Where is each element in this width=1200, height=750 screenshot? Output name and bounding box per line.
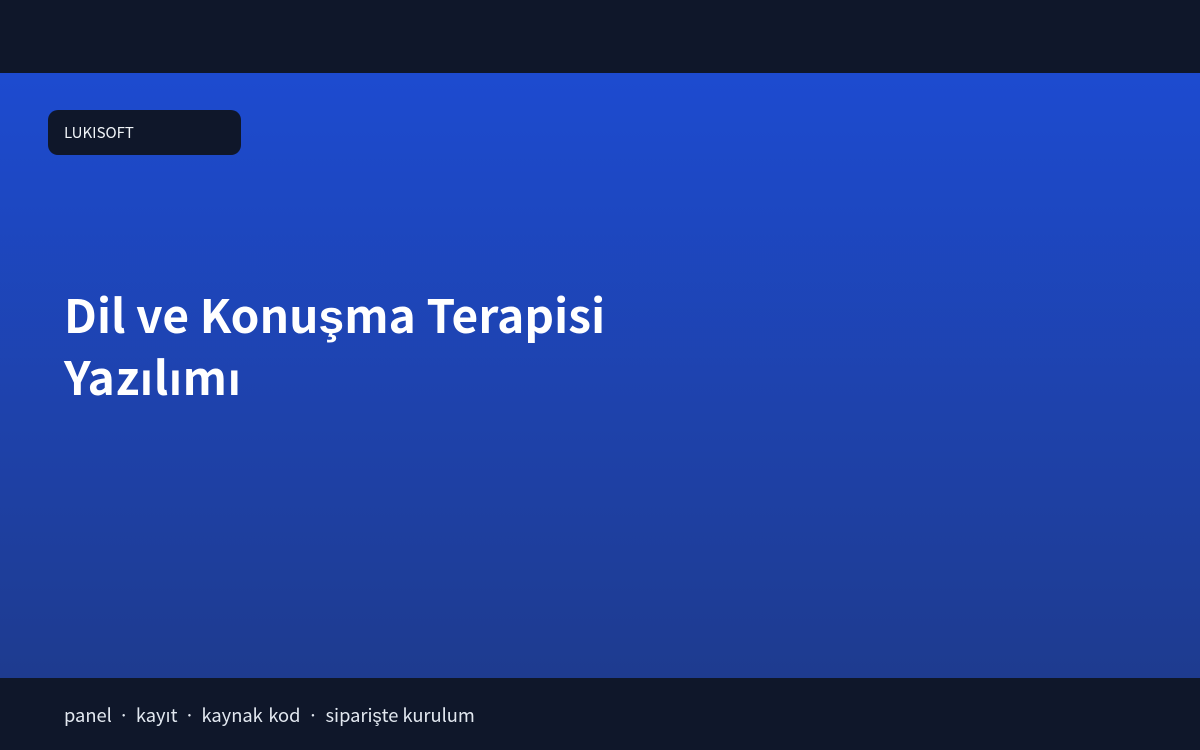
title — [64, 281, 605, 409]
feature list: · — [184, 702, 195, 728]
title: Dil ve Konuşma Terapisi — [64, 281, 605, 347]
brand badge: LUKISOFT — [64, 122, 134, 143]
feature list: · — [119, 702, 129, 728]
feature list: · — [308, 702, 318, 728]
title: Yazılımı — [64, 343, 241, 409]
top bar — [0, 0, 1200, 73]
bottom bar — [0, 678, 1200, 750]
brand badge — [48, 110, 241, 155]
feature list: panel kayıt kaynak kod siparişte kurulum — [64, 702, 475, 728]
